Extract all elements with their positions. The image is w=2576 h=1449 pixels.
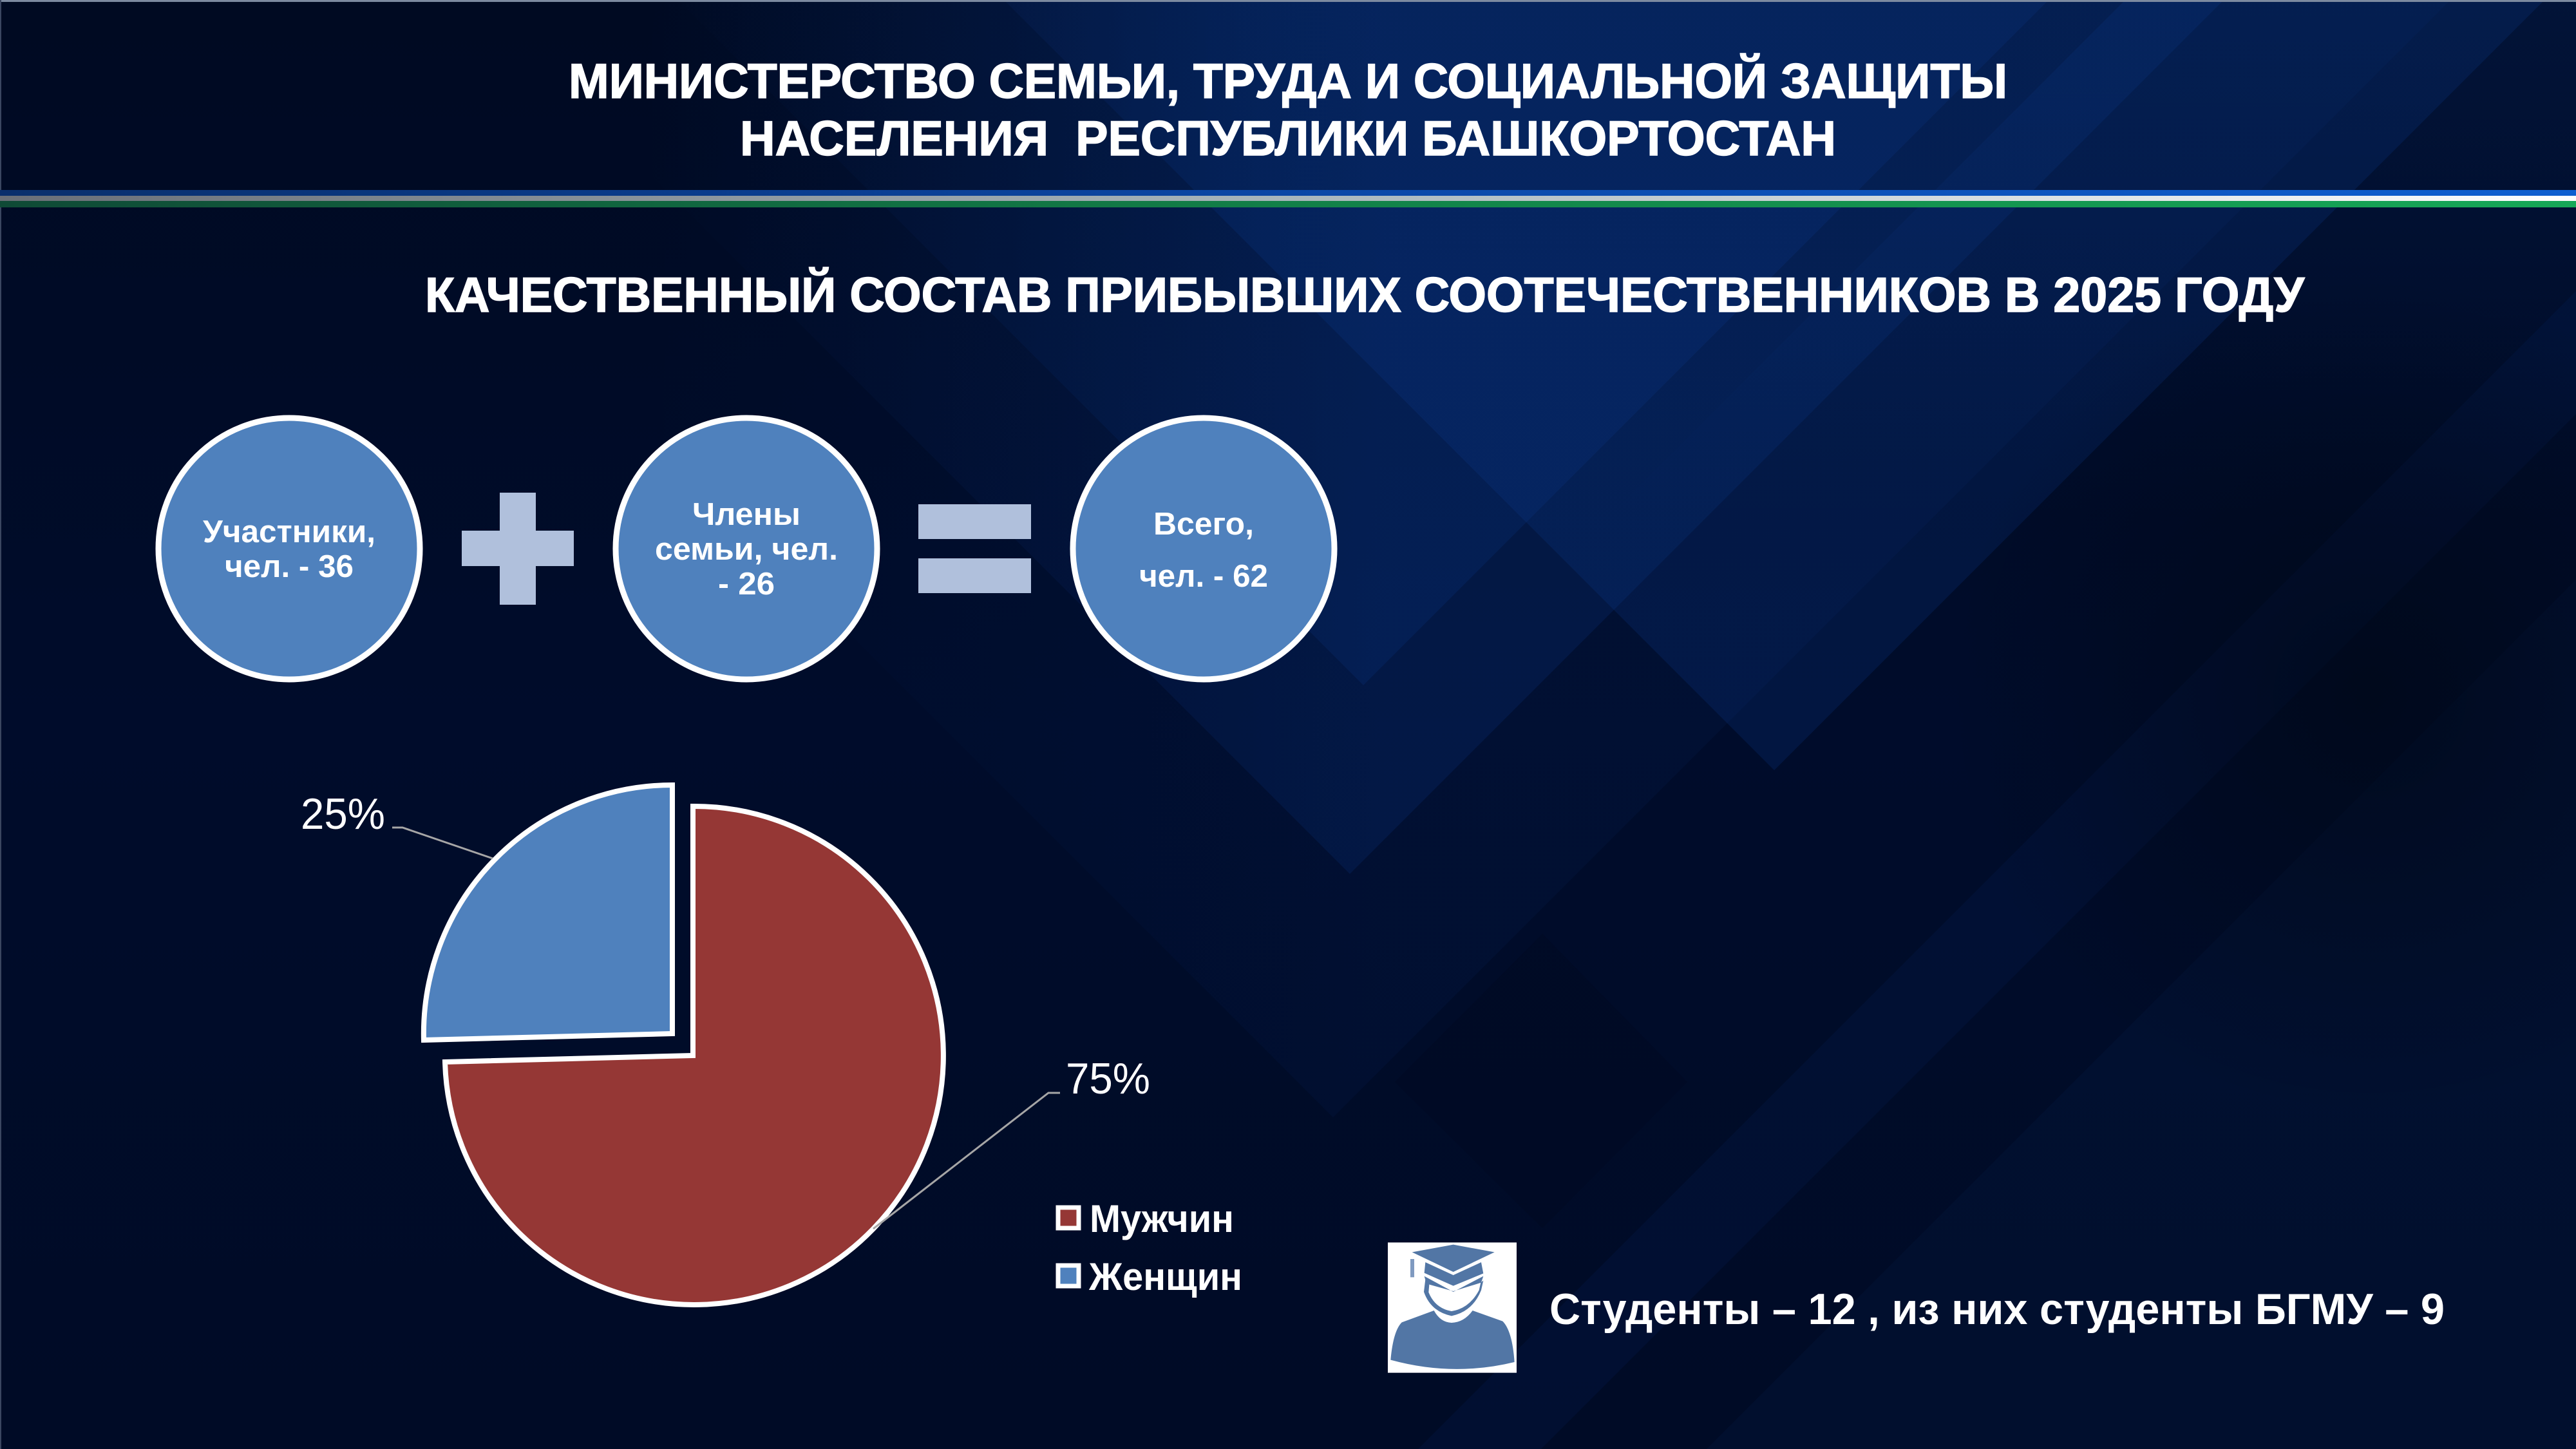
legend [1058,1197,1242,1298]
icon: student [1388,1242,1517,1373]
students text: Студенты – 12 , из них студенты БГМУ – 9 [1549,1285,2445,1334]
legend: Женщин [1088,1255,1242,1298]
title [569,53,2007,166]
header divider line [0,190,2576,207]
data label 75%: 75% [1066,1054,1150,1103]
pie slice: women 25% [424,785,672,1040]
pie chart [301,785,1150,1305]
title: НАСЕЛЕНИЯ РЕСПУБЛИКИ БАШКОРТОСТАН [740,111,1836,166]
circle: total: Всего, [1153,507,1254,542]
pie slice: men 75% [445,806,943,1305]
circle: total [1073,418,1334,679]
circle: participants: чел. - 36 [225,549,354,584]
legend: Мужчин [1090,1197,1234,1240]
leader line 25% [392,828,493,858]
icon: equals [918,504,1031,593]
circle: family members: Члены [692,497,800,532]
circle: total: чел. - 62 [1139,559,1268,594]
data label 25%: 25% [301,790,385,838]
circle: participants: Участники, [203,515,375,549]
subtitle: КАЧЕСТВЕННЫЙ СОСТАВ ПРИБЫВШИХ СООТЕЧЕСТВЕННИКОВ В 2025 ГОДУ [425,267,2305,323]
circle: family members [616,418,877,679]
circle: participants [158,418,420,679]
circle: family members: семьи, чел. [655,532,838,567]
icon: plus [462,493,574,605]
circle: family members: - 26 [718,567,775,601]
leader line 75% [873,1093,1060,1229]
title: МИНИСТЕРСТВО СЕМЬИ, ТРУДА И СОЦИАЛЬНОЙ ЗАЩИТЫ [569,53,2007,109]
